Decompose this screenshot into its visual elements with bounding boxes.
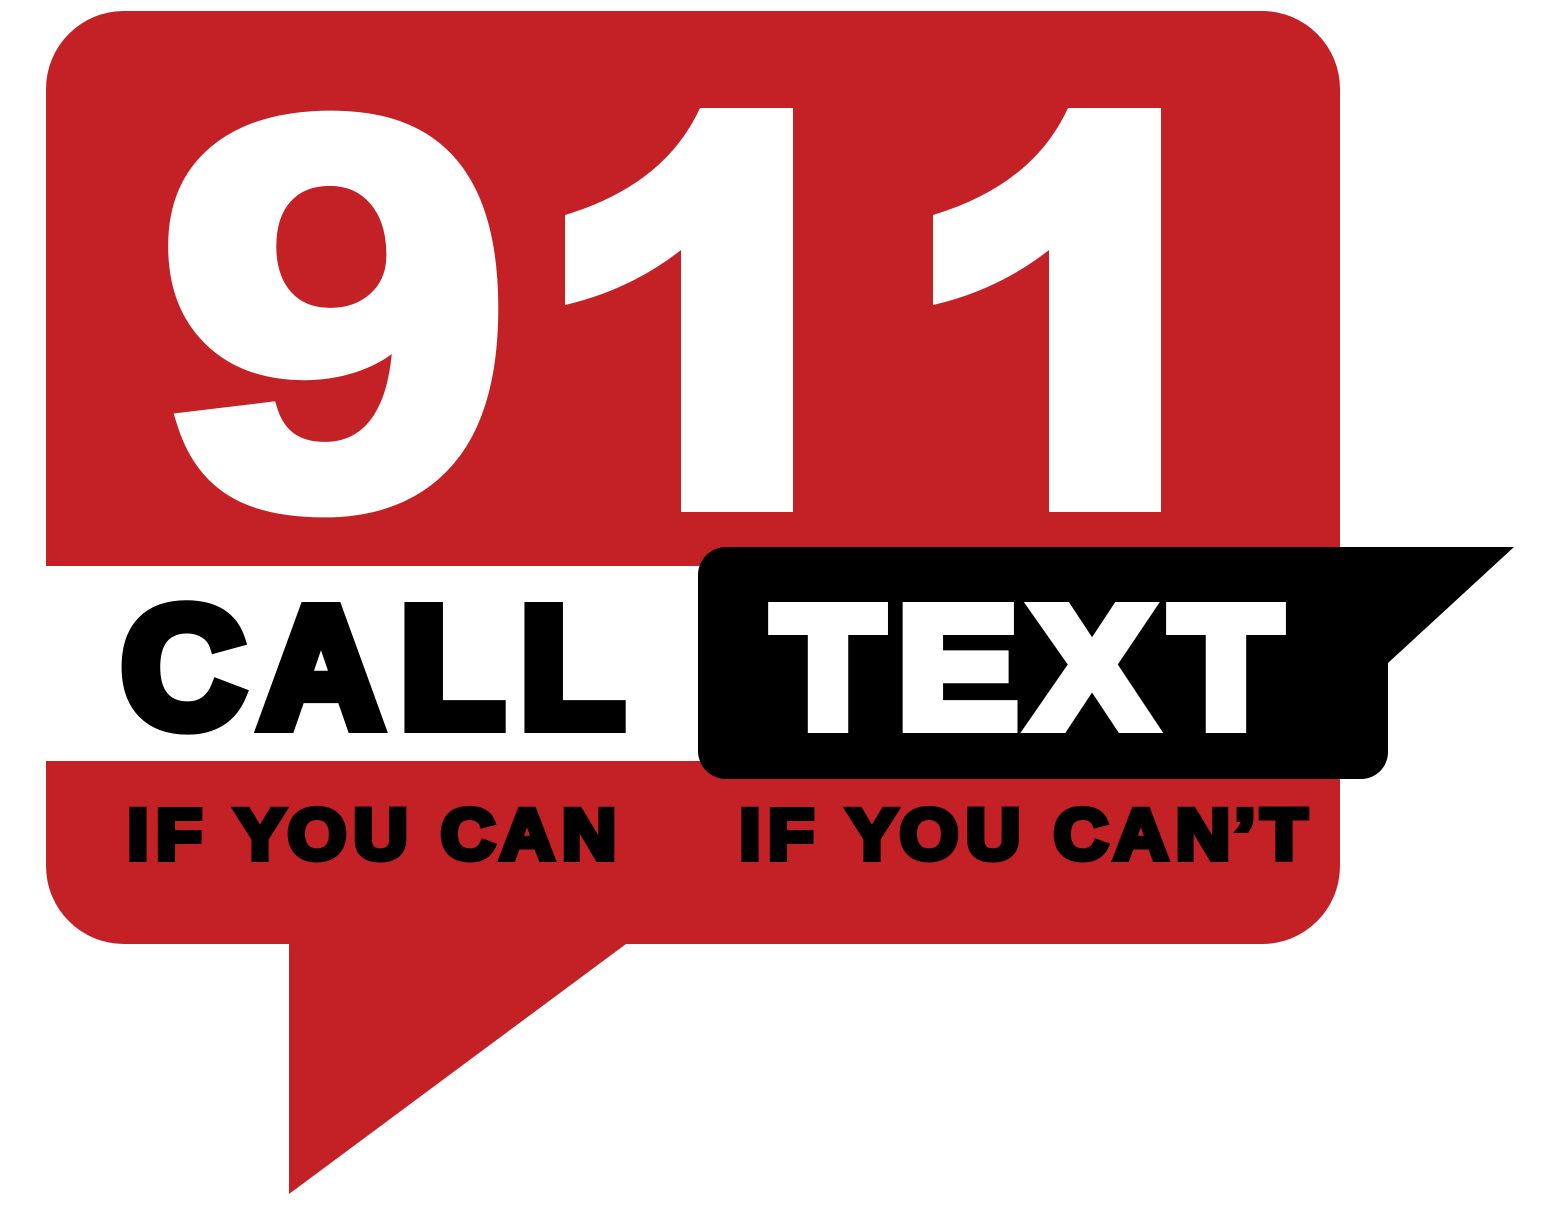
white band behind CALL [46, 566, 746, 761]
label: CALL: CALL [122, 573, 624, 763]
black text flag [698, 547, 1514, 779]
headline: 911: 1 [935, 0, 1247, 624]
headline: 911: 1 [567, 0, 879, 624]
caption: IF YOU CAN'T: IF YOU CAN’T [739, 795, 1307, 875]
caption: IF YOU CAN: IF YOU CAN [128, 795, 616, 875]
headline: 911: 9 [155, 4, 513, 621]
headline: 911 [168, 108, 1161, 518]
label: TEXT: TEXT [774, 572, 1280, 762]
